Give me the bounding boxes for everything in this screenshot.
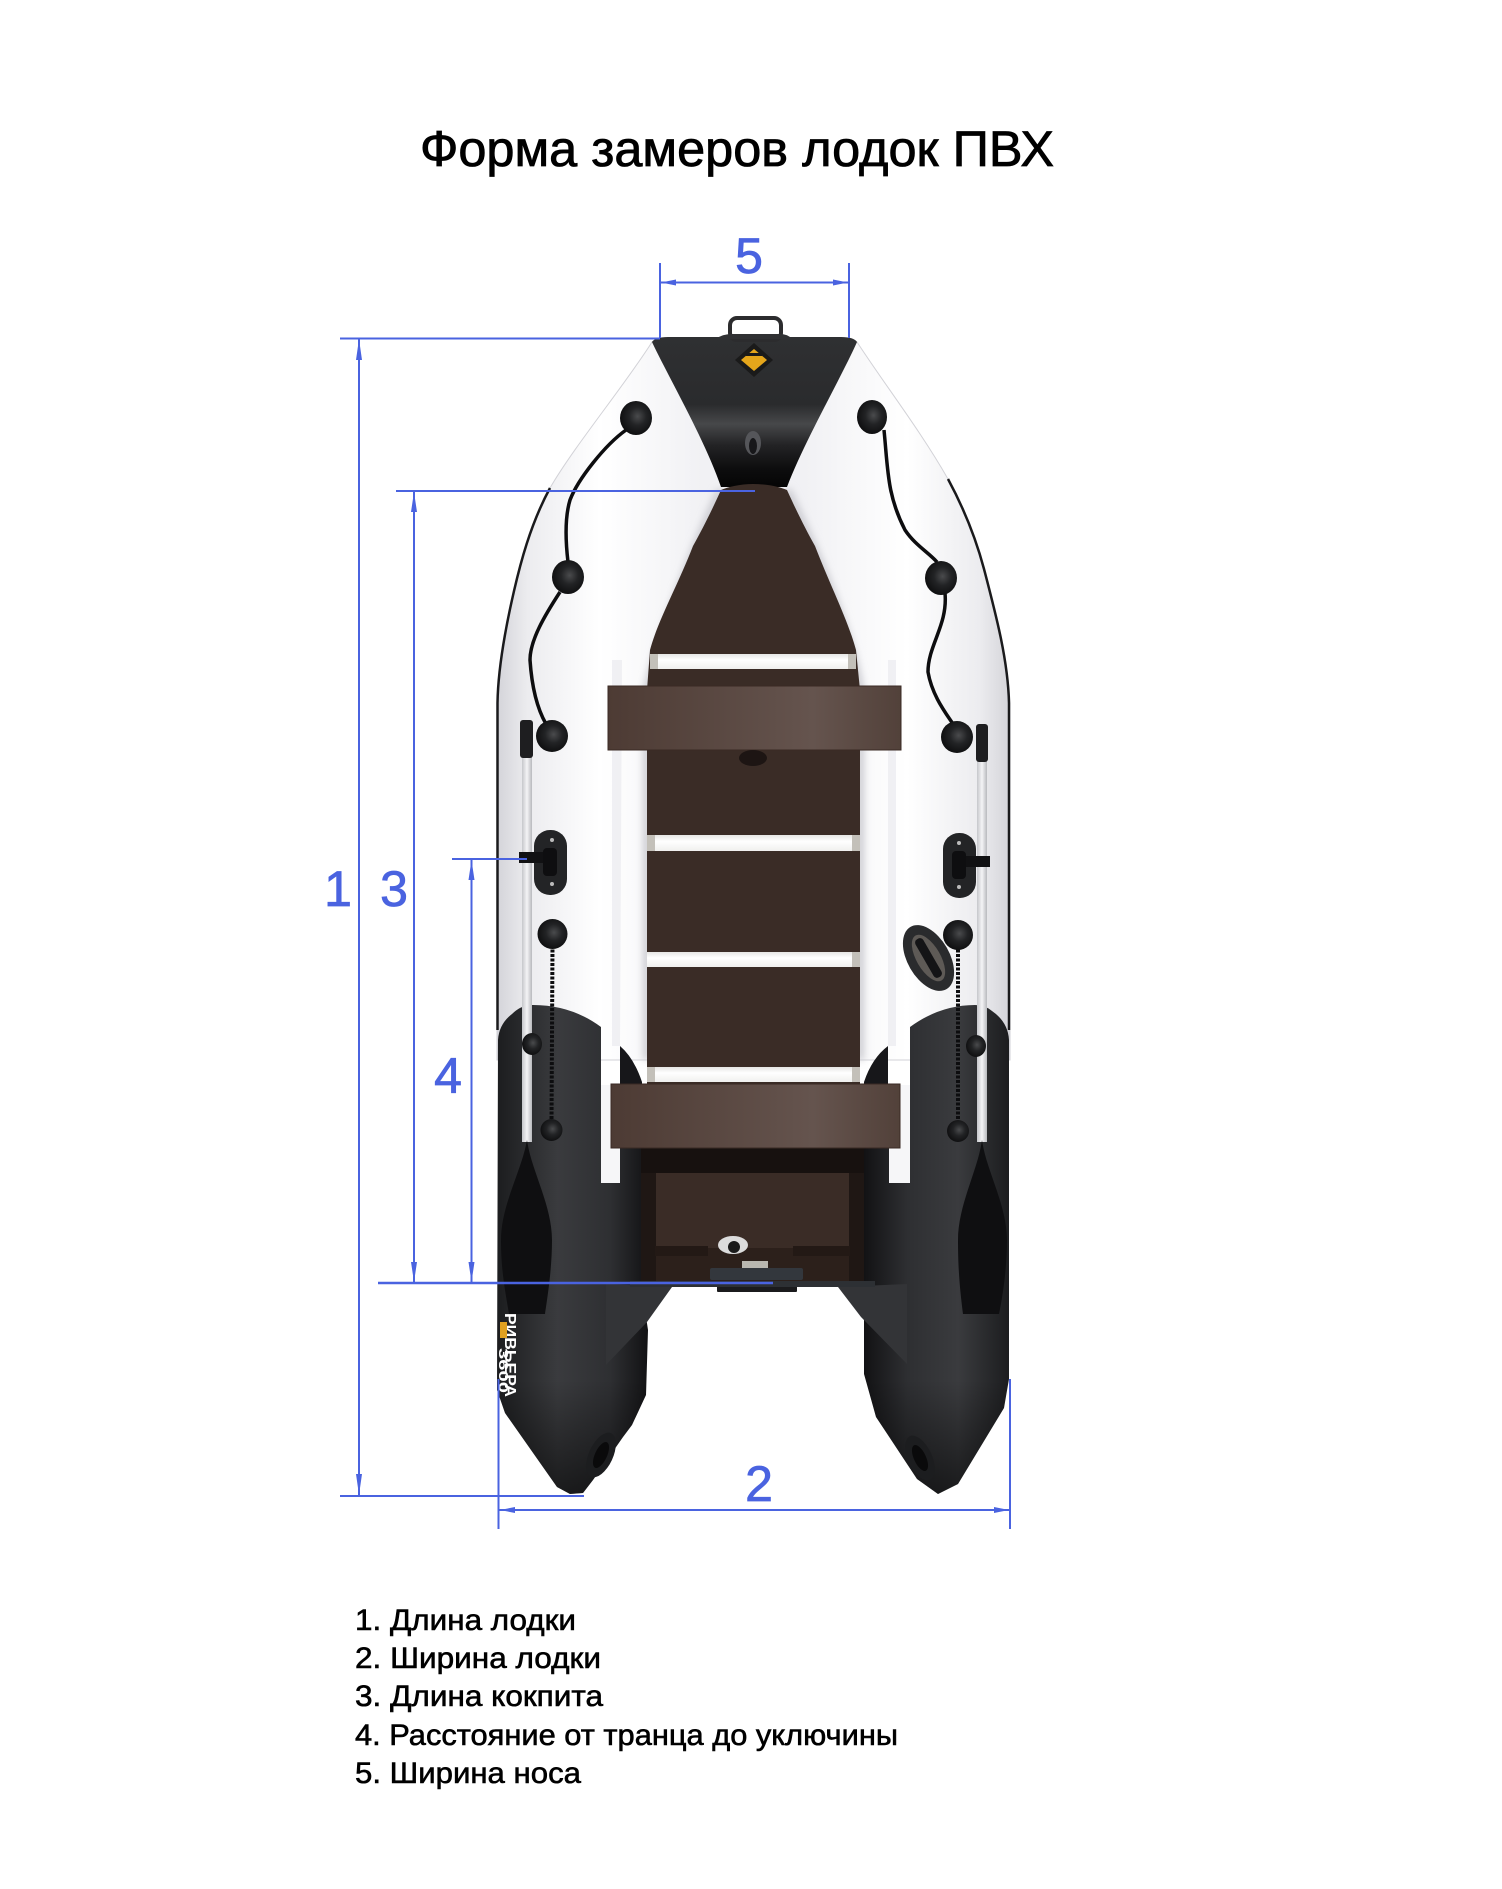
valve cover (892, 916, 965, 1000)
dimension 4: transom to oarlock (434, 859, 527, 1282)
floor strip 2 (647, 835, 860, 851)
dimension 5: bow width: 5 (735, 228, 763, 284)
dimension 3: cockpit length (380, 491, 755, 1282)
right oarlock (943, 833, 990, 898)
logo badge (735, 343, 773, 377)
dimension 2: boat width (498, 1379, 1010, 1529)
floor strip 1 (650, 654, 856, 669)
title: Форма замеров лодок ПВХ (420, 121, 1054, 177)
floor shading (640, 1148, 864, 1173)
transom base line (378, 1282, 773, 1284)
white hull tubes (497, 342, 1010, 1060)
legend item 3: 3. Длина кокпита (355, 1680, 603, 1713)
black bow panel (652, 337, 857, 487)
hull dark outer edge (498, 479, 1009, 1030)
fin left (606, 1284, 672, 1365)
brand mark: 3600 (496, 1348, 511, 1393)
stern ring left (580, 1428, 622, 1482)
bow ring (745, 431, 761, 455)
mooring ropes (530, 430, 958, 1122)
left oar (501, 720, 552, 1314)
legend item 4: 4. Расстояние от транца до уключины (355, 1719, 898, 1752)
white inner tube strips (601, 1085, 910, 1183)
stern ring right (899, 1431, 941, 1485)
dimension 3: cockpit length: 3 (380, 861, 408, 917)
cockpit floor (640, 484, 864, 1284)
brand mark: РИВЬЕРА (501, 1313, 518, 1397)
legend item 5: 5. Ширина носа (355, 1757, 581, 1790)
illustration: inflatable boat top view (496, 318, 1010, 1494)
legend item 1: 1. Длина лодки (355, 1604, 576, 1637)
legend item 2: 2. Ширина лодки (355, 1642, 601, 1675)
right oar (958, 724, 1007, 1314)
transom plate (630, 1236, 875, 1292)
fin right (838, 1284, 907, 1364)
rope anchor patches (522, 400, 986, 1142)
yellow brand spot (500, 1322, 507, 1338)
dimension 1: boat length: 1 (324, 861, 352, 917)
tube tip shading (497, 1380, 1008, 1494)
dimension 2: boat width: 2 (745, 1456, 773, 1512)
dimension 1: boat length (324, 338, 660, 1496)
floor strip 4 (647, 1067, 860, 1082)
tube inner shadow beside floor (647, 490, 860, 1060)
seat 1 (608, 686, 901, 750)
left oarlock (519, 830, 567, 895)
right black tube (864, 1005, 1009, 1494)
inner tube highlight (612, 660, 896, 1046)
black inner corners (620, 1046, 888, 1090)
left black tube (497, 1005, 648, 1494)
dimension 4: transom to oarlock: 4 (434, 1048, 462, 1104)
seat 2 (611, 1084, 900, 1148)
dimension 5: bow width (660, 228, 849, 338)
floor strip 3 (647, 952, 860, 967)
legend list (355, 1604, 898, 1790)
drain under seat (739, 750, 767, 766)
bow handle (716, 318, 792, 340)
